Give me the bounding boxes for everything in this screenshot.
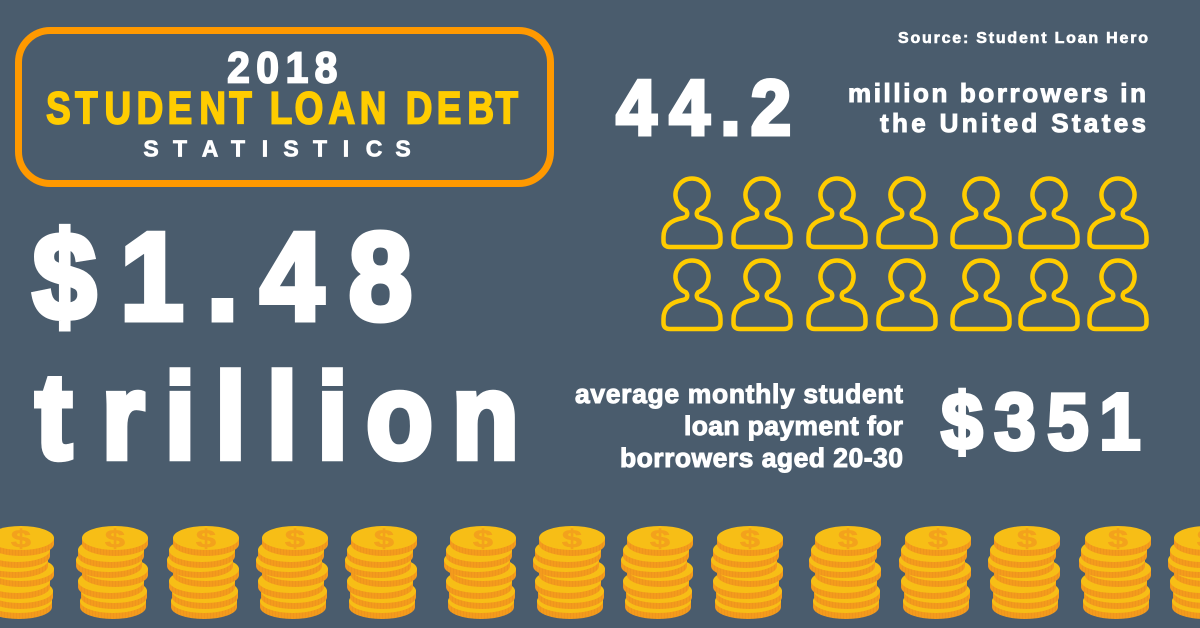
coin stacks: $ [11, 525, 31, 553]
coin stacks: $ [740, 525, 760, 553]
coin stacks: $ [473, 525, 493, 553]
borrowers figure: 44.2 [616, 64, 791, 151]
title main: STUDENT LOAN DEBT [46, 83, 518, 133]
title sub: STATISTICS [143, 136, 411, 162]
people icons [664, 179, 1146, 329]
coin stacks: $ [374, 525, 394, 553]
coin stacks: $ [650, 525, 670, 553]
payment description [575, 379, 903, 473]
coin stacks: $ [105, 525, 125, 553]
source: Source: Student Loan Hero [898, 30, 1148, 47]
coin stacks: $ [1108, 525, 1128, 553]
total debt unit: trillion [36, 350, 519, 484]
title panel [18, 30, 550, 184]
borrowers description [848, 78, 1146, 138]
payment description: loan payment for [684, 411, 903, 441]
total debt figure: $1.48 [33, 208, 412, 347]
title year: 2018 [227, 44, 337, 93]
title frame [18, 30, 550, 184]
payment description: average monthly student [575, 379, 903, 409]
coin stacks: $ [928, 525, 948, 553]
borrowers description: the United States [880, 108, 1146, 138]
borrowers description: million borrowers in [848, 78, 1146, 108]
coin stacks: $ [285, 525, 305, 553]
coin stacks: $ [1017, 525, 1037, 553]
payment figure: $351 [941, 378, 1141, 467]
coin stacks [0, 525, 1200, 619]
coin stacks: $ [196, 525, 216, 553]
coin stacks: $ [562, 525, 582, 553]
coin stacks: $ [838, 525, 858, 553]
payment description: borrowers aged 20-30 [620, 443, 903, 473]
